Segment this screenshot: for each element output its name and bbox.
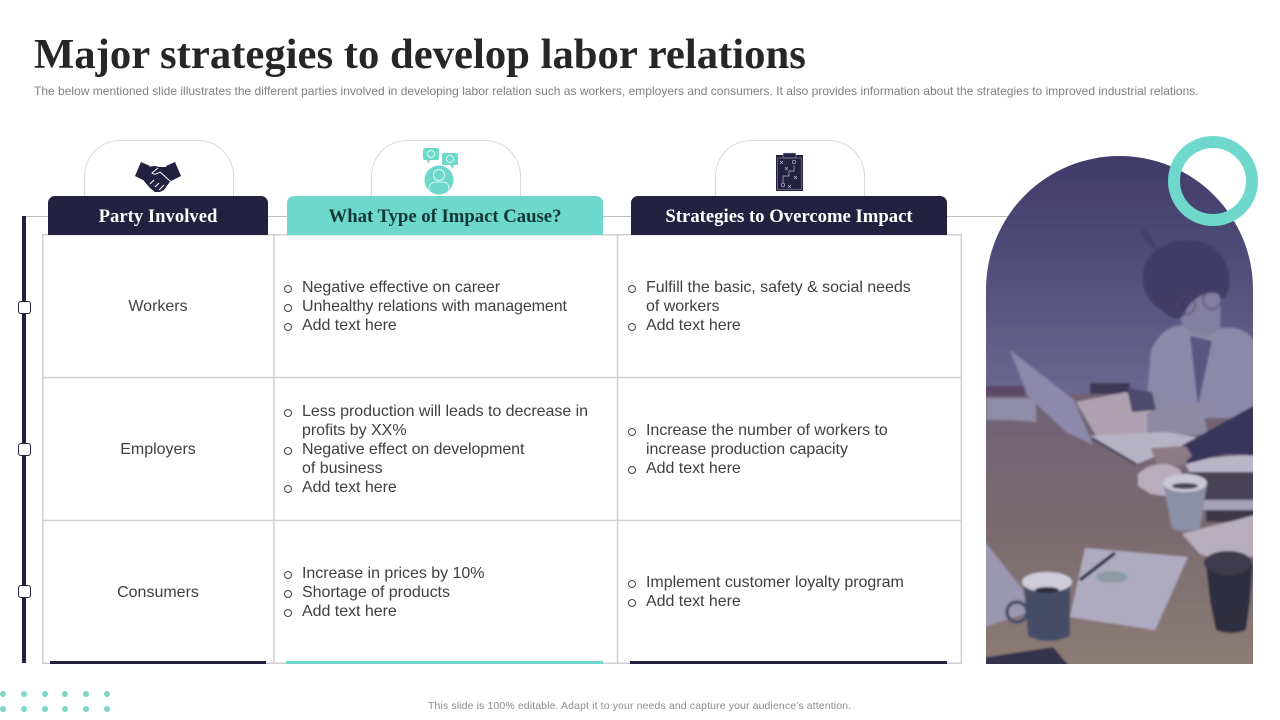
impact: consumers: Add text here xyxy=(302,603,397,620)
coffee mug xyxy=(1007,602,1027,622)
phone xyxy=(1090,383,1130,394)
table xyxy=(42,234,962,664)
laptop xyxy=(1010,350,1093,445)
strategy: employers: Increase the number of workers to xyxy=(646,422,888,439)
footer note: This slide is 100% editable. Adapt it to your needs and capture your audience's attention. xyxy=(428,700,851,712)
decorative teal ring xyxy=(1168,136,1258,226)
impact: workers: Negative effective on career xyxy=(302,279,500,296)
strategy: consumers: Implement customer loyalty program xyxy=(646,574,904,591)
strategy: employers xyxy=(628,422,888,477)
strategy: consumers: Add text here xyxy=(646,593,741,610)
header: party involved: Party Involved xyxy=(99,206,217,227)
impact: consumers xyxy=(284,565,484,620)
impact: employers: Negative effect on development xyxy=(302,441,524,458)
keyboard and hands xyxy=(1076,392,1151,439)
timeline knob: consumers xyxy=(18,585,31,598)
impact: employers xyxy=(284,403,588,496)
table surface xyxy=(981,394,1258,669)
header: party involved xyxy=(48,196,268,235)
footer bar: impact xyxy=(286,661,603,664)
impact: workers: Unhealthy relations with management xyxy=(302,298,567,315)
icon: person with speech bubbles xyxy=(423,148,458,194)
brown hand xyxy=(1151,446,1192,466)
plant xyxy=(1142,230,1156,248)
hair xyxy=(1143,240,1229,319)
laptop corner left xyxy=(986,542,1026,628)
hands near cup xyxy=(1138,464,1181,498)
impact: consumers: Shortage of products xyxy=(302,584,450,601)
title: Major strategies to develop labor relations xyxy=(34,31,806,78)
icon tab: impact xyxy=(371,140,521,211)
dark tablet xyxy=(986,646,1069,664)
impact: workers xyxy=(284,279,567,334)
knit sleeve xyxy=(1147,402,1208,438)
header: strategies: Strategies to Overcome Impact xyxy=(665,206,913,227)
travel tumbler xyxy=(1206,564,1253,633)
dark sleeve arm xyxy=(1181,404,1258,464)
table edge and papers left xyxy=(981,386,1025,396)
subtitle: The below mentioned slide illustrates the different parties involved in developing labor relation such as workers, employers and consumers. It also provides information about the strategies to improved industrial relations. xyxy=(34,84,1199,98)
white paper right xyxy=(1183,454,1258,474)
strategy: employers: increase production capacity xyxy=(646,441,848,458)
person body xyxy=(1146,325,1258,418)
photo: office meeting with purple tint xyxy=(986,156,1253,664)
strategy: workers: Add text here xyxy=(646,317,741,334)
cup xyxy=(1163,483,1207,531)
header: impact xyxy=(287,196,603,235)
header connector line xyxy=(24,216,1014,217)
lower hand xyxy=(1182,514,1258,560)
timeline rail xyxy=(22,216,26,663)
impact: employers: Add text here xyxy=(302,479,397,496)
header: impact: What Type of Impact Cause? xyxy=(329,206,561,227)
strategy: workers: of workers xyxy=(646,298,720,315)
strategy: workers xyxy=(628,279,911,334)
impact: employers: Less production will leads to decrease in xyxy=(302,403,588,420)
timeline knob: workers xyxy=(18,301,31,314)
icon: handshake xyxy=(135,162,181,192)
timeline knob: employers xyxy=(18,443,31,456)
impact: employers: of business xyxy=(302,460,383,477)
impact: consumers: Increase in prices by 10% xyxy=(302,565,484,582)
row label: employers: Employers xyxy=(120,441,196,458)
row label: consumers: Consumers xyxy=(117,584,199,601)
person face xyxy=(1180,292,1222,335)
icon: clipboard strategy xyxy=(776,152,803,191)
icon tab: party involved xyxy=(84,140,234,211)
dark block xyxy=(1189,470,1253,500)
strategy: employers: Add text here xyxy=(646,460,741,477)
notebook xyxy=(1090,432,1201,464)
footer bar: party xyxy=(50,661,266,664)
footer bar: strategies xyxy=(630,661,947,664)
header: strategies xyxy=(631,196,947,235)
impact: employers: profits by XX% xyxy=(302,422,407,439)
dot pattern xyxy=(0,691,110,712)
impact: workers: Add text here xyxy=(302,317,397,334)
icon tab: strategies xyxy=(715,140,865,211)
strategy: workers: Fulfill the basic, safety & social needs xyxy=(646,279,911,296)
white strip xyxy=(1203,500,1258,510)
strategy: consumers xyxy=(628,574,904,610)
printed paper xyxy=(1070,548,1188,630)
row label: workers: Workers xyxy=(128,298,188,315)
